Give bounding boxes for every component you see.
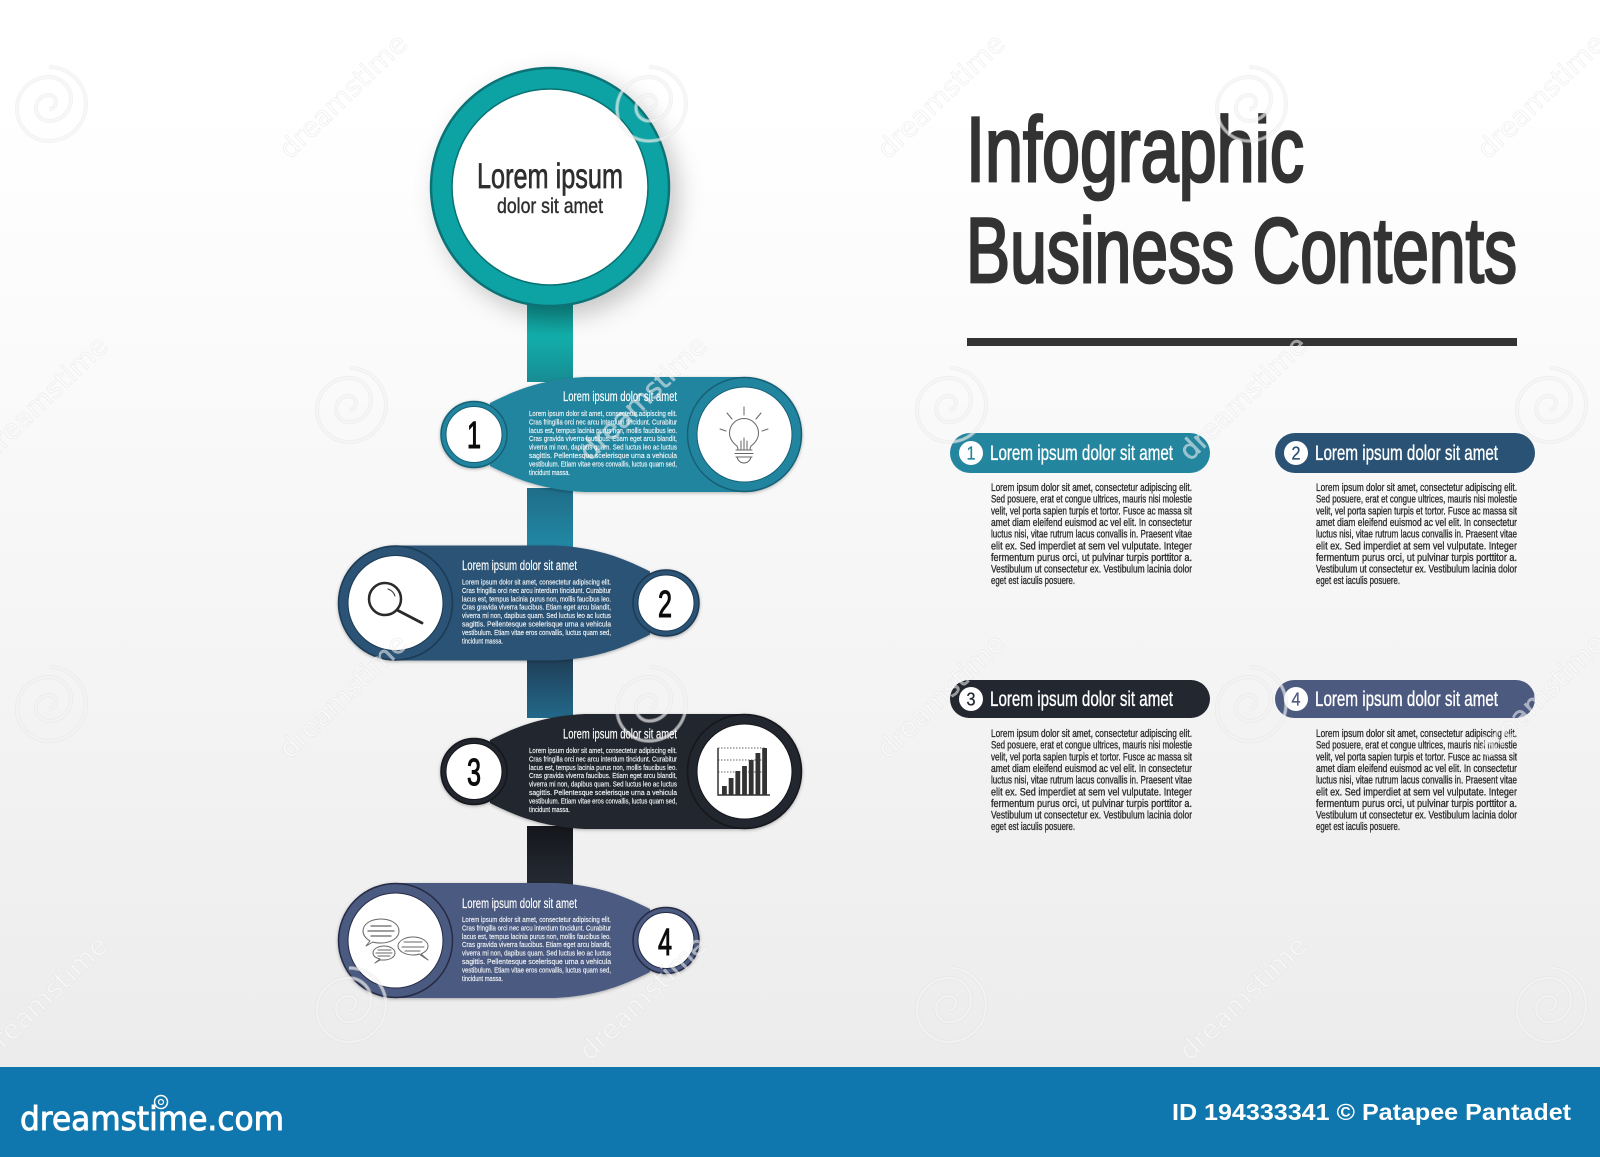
card 4 text: tincidunt massa.	[462, 974, 503, 983]
icon: bar chart	[718, 748, 770, 795]
card 2 text: viverra mi non, dapibus quam. Sed luctus leo ac luctus	[462, 611, 611, 620]
watermark text: dreamstime	[1173, 930, 1314, 1067]
panel 2 text: eget est iaculis posuere.	[1316, 575, 1400, 587]
card 2 title: Lorem ipsum dolor sit amet	[462, 558, 577, 573]
watermark text: dreamstime	[573, 930, 714, 1067]
panel 1 text: fermentum purus orci, ut pulvinar turpis porttitor a.	[991, 552, 1192, 564]
panel 4 text: elit ex. Sed imperdiet at sem vel vulputate. Integer	[1316, 786, 1517, 798]
panel 1 text: eget est iaculis posuere.	[991, 575, 1075, 587]
panel 2 number badge	[1284, 441, 1308, 465]
title underline	[967, 338, 1517, 346]
panel 4 text: amet diam eleifend euismod ac vel elit. In consectetur	[1316, 763, 1517, 775]
title: Infographic	[966, 99, 1304, 201]
panel 1 number badge	[959, 441, 983, 465]
panel 1 text: amet diam eleifend euismod ac vel elit. In consectetur	[991, 517, 1192, 529]
panel 4 heading: Lorem ipsum dolor sit amet	[1315, 688, 1498, 711]
panel 1 text: Lorem ipsum dolor sit amet, consectetur adipiscing elit.	[991, 482, 1192, 494]
panel 3 number badge: 3	[966, 690, 976, 710]
main circle	[431, 68, 669, 306]
card 4 title: Lorem ipsum dolor sit amet	[462, 896, 577, 911]
card 3 text: Lorem ipsum dolor sit amet, consectetur adipiscing elit.	[529, 746, 677, 755]
card 1	[441, 377, 802, 492]
panel 4 number badge: 4	[1292, 690, 1300, 710]
card 1 text: viverra mi non, dapibus quam. Sed luctus leo ac luctus	[529, 443, 677, 452]
icon: chat bubbles	[363, 919, 428, 963]
panel 1 text: Vestibulum ut consectetur ex. Vestibulum lacinia dolor	[991, 564, 1192, 576]
card 4 text: vestibulum. Etiam vitae eros convallis, luctus quam sed,	[462, 965, 611, 974]
card 4 shape	[338, 883, 699, 998]
panel 2 number badge: 2	[1292, 444, 1300, 464]
watermark text: dreamstime	[871, 628, 1012, 765]
icon: light bulb	[720, 407, 768, 463]
card 2 text: tincidunt massa.	[462, 636, 503, 645]
card 4 text	[462, 915, 612, 983]
panel 2 text: Sed posuere, erat et congue ultrices, mauris nisi molestie	[1316, 494, 1517, 506]
card 4 text: Lorem ipsum dolor sit amet, consectetur adipiscing elit.	[462, 915, 611, 924]
card 3 text: lacus est, tempus lacinia purus non, mollis faucibus leo.	[529, 763, 677, 772]
panel 4	[1275, 680, 1535, 833]
card 3 text	[529, 746, 678, 814]
panel 3 text: fermentum purus orci, ut pulvinar turpis porttitor a.	[991, 798, 1192, 810]
panel 2 text: Vestibulum ut consectetur ex. Vestibulum lacinia dolor	[1316, 564, 1517, 576]
main circle heading: Lorem ipsum	[477, 157, 623, 196]
panel 4 header pill	[1275, 680, 1535, 718]
number 4: 4	[658, 922, 672, 964]
panel 4 text: Vestibulum ut consectetur ex. Vestibulum lacinia dolor	[1316, 810, 1517, 822]
card 1 text: sagittis. Pellentesque scelerisque urna a vehicula	[529, 451, 678, 460]
panel 1	[950, 433, 1210, 587]
card 3 text: sagittis. Pellentesque scelerisque urna a vehicula	[529, 788, 678, 797]
panel 1 header pill	[950, 433, 1210, 473]
card 2 text: lacus est, tempus lacinia purus non, mollis faucibus leo.	[462, 594, 611, 603]
card 2	[338, 546, 699, 660]
panel 1 text: elit ex. Sed imperdiet at sem vel vulputate. Integer	[991, 540, 1192, 552]
panel 2	[1275, 433, 1535, 587]
card 1 text: Lorem ipsum dolor sit amet, consectetur adipiscing elit.	[529, 409, 677, 418]
panel 4 text: velit, vel porta sapien turpis et tortor. Fusce ac massa sit	[1316, 751, 1517, 763]
panel 4 text: eget est iaculis posuere.	[1316, 821, 1400, 833]
panel 2 text: fermentum purus orci, ut pulvinar turpis porttitor a.	[1316, 552, 1517, 564]
card 1 text: lacus est, tempus lacinia purus non, mollis faucibus leo.	[529, 426, 677, 435]
panel 3	[950, 680, 1210, 833]
watermark text: dreamstime	[871, 28, 1012, 165]
card 3 text: vestibulum. Etiam vitae eros convallis, luctus quam sed,	[529, 796, 677, 805]
panel 3 text: luctus nisi, vitae rutrum lacus convallis in. Praesent vitae	[991, 775, 1192, 787]
card 2 text: Cras gravida viverra faucibus. Etiam eget arcu blandit,	[462, 603, 611, 612]
card 2 text: sagittis. Pellentesque scelerisque urna a vehicula	[462, 620, 612, 628]
card 3 text: Cras fringilla orci nec arcu interdum tincidunt. Curabitur	[529, 754, 677, 763]
card 2 shape	[338, 546, 699, 660]
main circle subheading: dolor sit amet	[497, 195, 603, 218]
panel 1 text: velit, vel porta sapien turpis et tortor. Fusce ac massa sit	[991, 505, 1192, 517]
card 1 text: Cras gravida viverra faucibus. Etiam eget arcu blandit,	[529, 434, 677, 443]
panel 3 text: elit ex. Sed imperdiet at sem vel vulputate. Integer	[991, 786, 1192, 798]
card 1 title: Lorem ipsum dolor sit amet	[563, 389, 677, 404]
card 1 text: tincidunt massa.	[529, 468, 570, 477]
card 2 text	[462, 578, 612, 645]
panel 3 number badge	[959, 687, 983, 711]
panel 4 text: Sed posuere, erat et congue ultrices, mauris nisi molestie	[1316, 740, 1517, 752]
panel 1 text: Sed posuere, erat et congue ultrices, mauris nisi molestie	[991, 494, 1192, 506]
panel 1 heading: Lorem ipsum dolor sit amet	[990, 442, 1173, 465]
card 1 shape	[441, 377, 802, 492]
panel 1 number badge: 1	[966, 444, 976, 464]
card 4 text: Cras gravida viverra faucibus. Etiam eget arcu blandit,	[462, 940, 611, 949]
number 1: 1	[467, 415, 481, 457]
number 3: 3	[467, 752, 481, 794]
number 2: 2	[658, 584, 672, 626]
panel 3 text	[991, 728, 1192, 833]
card 2 text: Lorem ipsum dolor sit amet, consectetur adipiscing elit.	[462, 578, 611, 586]
panel 1 text	[991, 482, 1192, 587]
panel 3 text: amet diam eleifend euismod ac vel elit. In consectetur	[991, 763, 1192, 775]
card 4 text: sagittis. Pellentesque scelerisque urna a vehicula	[462, 957, 612, 966]
card 3 shape	[441, 714, 802, 829]
watermark text: dreamstime	[573, 330, 714, 467]
panel 3 heading: Lorem ipsum dolor sit amet	[990, 688, 1173, 711]
panel 3 header pill	[950, 680, 1210, 718]
panel 3 text: Vestibulum ut consectetur ex. Vestibulum lacinia dolor	[991, 810, 1192, 822]
footer logo: dreamstime.com	[20, 1099, 284, 1138]
panel 2 text: luctus nisi, vitae rutrum lacus convallis in. Praesent vitae	[1316, 529, 1517, 541]
card 4 text: lacus est, tempus lacinia purus non, mollis faucibus leo.	[462, 932, 611, 941]
card 1 text: vestibulum. Etiam vitae eros convallis, luctus quam sed,	[529, 459, 677, 468]
panel 2 text: amet diam eleifend euismod ac vel elit. In consectetur	[1316, 517, 1517, 529]
panel 3 text: eget est iaculis posuere.	[991, 821, 1075, 833]
panel 3 text: Lorem ipsum dolor sit amet, consectetur adipiscing elit.	[991, 728, 1192, 740]
card 3 text: Cras gravida viverra faucibus. Etiam eget arcu blandit,	[529, 771, 677, 780]
card 4	[338, 883, 699, 998]
card 3 text: viverra mi non, dapibus quam. Sed luctus leo ac luctus	[529, 780, 677, 789]
footer credit: ID 194333341 © Patapee Pantadet	[1172, 1099, 1571, 1125]
panel 2 text: elit ex. Sed imperdiet at sem vel vulputate. Integer	[1316, 540, 1517, 552]
card 2 text: Cras fringilla orci nec arcu interdum tincidunt. Curabitur	[462, 586, 611, 595]
panel 4 number badge	[1284, 687, 1308, 711]
panel 4 text: Lorem ipsum dolor sit amet, consectetur adipiscing elit.	[1316, 728, 1517, 740]
panel 4 text: luctus nisi, vitae rutrum lacus convallis in. Praesent vitae	[1316, 775, 1517, 787]
title	[966, 99, 1517, 302]
card 3 text: tincidunt massa.	[529, 805, 570, 814]
panel 4 text: fermentum purus orci, ut pulvinar turpis porttitor a.	[1316, 798, 1517, 810]
panel 3 text: Sed posuere, erat et congue ultrices, mauris nisi molestie	[991, 740, 1192, 752]
card 1 text: Cras fringilla orci nec arcu interdum tincidunt. Curabitur	[529, 417, 677, 426]
panel 4 text	[1316, 728, 1517, 833]
icon: magnifier	[369, 583, 422, 623]
panel 3 text: velit, vel porta sapien turpis et tortor. Fusce ac massa sit	[991, 751, 1192, 763]
watermark text: dreamstime	[1173, 330, 1314, 467]
card 4 text: Cras fringilla orci nec arcu interdum tincidunt. Curabitur	[462, 923, 611, 932]
card 3 title: Lorem ipsum dolor sit amet	[563, 726, 677, 742]
panel 2 text: velit, vel porta sapien turpis et tortor. Fusce ac massa sit	[1316, 505, 1517, 517]
card 1 text	[529, 409, 678, 477]
panel 2 text	[1316, 482, 1517, 587]
card 2 text: vestibulum. Etiam vitae eros convallis, luctus quam sed,	[462, 628, 611, 637]
watermark text: dreamstime	[273, 28, 414, 165]
timeline stem	[527, 300, 573, 886]
card 3	[441, 714, 802, 829]
panel 2 heading: Lorem ipsum dolor sit amet	[1315, 442, 1498, 465]
watermark text: dreamstime	[273, 628, 414, 765]
panel 2 header pill	[1275, 433, 1535, 473]
card 4 text: viverra mi non, dapibus quam. Sed luctus leo ac luctus	[462, 949, 611, 958]
panel 1 text: luctus nisi, vitae rutrum lacus convallis in. Praesent vitae	[991, 529, 1192, 541]
panel 2 text: Lorem ipsum dolor sit amet, consectetur adipiscing elit.	[1316, 482, 1517, 494]
footer bar	[0, 1067, 1600, 1157]
